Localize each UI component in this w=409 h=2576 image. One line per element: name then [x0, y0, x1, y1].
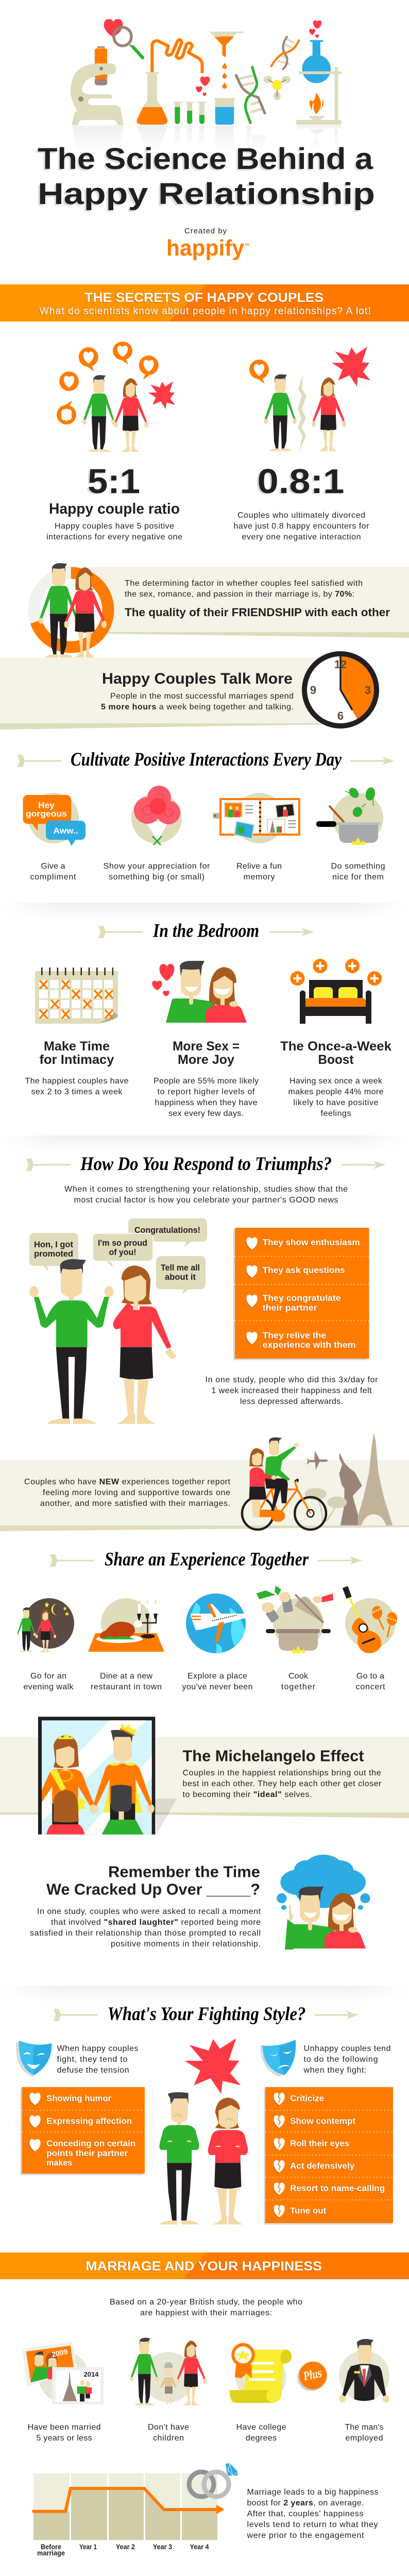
text: remember the time: We Cracked Up Over _____? — [46, 1880, 260, 1898]
panel: happy couples talk more: Happy Couples Talk More — [102, 670, 293, 687]
labels: happiest married people: Don't have — [148, 2423, 189, 2432]
icon: test tubes and beaker — [174, 98, 235, 125]
labels: cultivate actions: something big (or small) — [109, 873, 204, 882]
heading: how do you respond to triumphs: How Do You Respond to Triumphs? — [80, 1154, 332, 1175]
text: remember the time: positive moments in their relationship. — [111, 1940, 261, 1948]
text: unhappy couples fight: to do the following — [304, 2055, 378, 2064]
icon: couple without children — [130, 2338, 207, 2405]
text: michelangelo effect: The Michelangelo Effect — [182, 1747, 364, 1765]
panel: unhappy fight list: Show contempt — [290, 2116, 355, 2126]
text: divorced couples ratio: have just 0.8 happy encounters for — [234, 522, 369, 531]
happify logo: happify — [166, 235, 245, 261]
text: determining factor: The determining factor in whether couples feel satisfied with — [125, 579, 363, 588]
icon: globe with plane — [186, 1594, 247, 1653]
labels: cultivate actions: Relive a fun — [236, 862, 282, 871]
icon: microscope — [71, 46, 124, 125]
labels: cultivate actions: Give a — [41, 862, 65, 871]
illustration: woman listening — [113, 1265, 177, 1424]
illustration: mirror with ideal selves — [38, 1717, 155, 1835]
illustration: embracing couple — [39, 563, 79, 657]
illustration: couple on bicycle — [242, 1437, 326, 1530]
text: study result: In one study, people who did this 3x/day for — [205, 1376, 378, 1384]
text: more sex more joy: More Sex = — [173, 1039, 240, 1054]
text: marriage happiness boost: Marriage leads to a big happiness — [247, 2488, 378, 2497]
text: more sex more joy — [154, 1039, 259, 1118]
labels: cultivate actions: Do something — [331, 862, 385, 871]
chart: clock: 6 — [337, 709, 344, 722]
icon: happy mask — [16, 2041, 52, 2077]
labels: happiest married people — [28, 2423, 383, 2443]
text: marriage happiness boost: were prior to the engagement — [246, 2531, 364, 2540]
illustration: laughing couple with thought cloud — [277, 1855, 370, 1950]
text: make time for intimacy: sex 2 to 3 times a week — [31, 1088, 123, 1096]
icon: guitar and maracas — [343, 1586, 397, 1653]
text: marriage happiness boost: boost for 2 years, on average. — [247, 2499, 364, 2507]
text: once a week boost: likely to have positive — [294, 1098, 379, 1107]
icon: smiling couple with hearts — [152, 961, 247, 1023]
labels: cultivate actions: nice for them — [332, 873, 384, 882]
panel: triumph responses list: They congratulate — [263, 1293, 341, 1303]
panel: unhappy fight list: Criticize — [290, 2094, 324, 2103]
text: more sex more joy: to report higher levels of — [158, 1088, 255, 1096]
labels: shared experiences — [24, 1672, 385, 1691]
heading: in the bedroom: In the Bedroom — [152, 920, 259, 942]
panel: unhappy fight list: Tune out — [290, 2206, 326, 2215]
icon: compliment bubbles: gorgeous — [26, 809, 67, 819]
banner: secrets of happy couples — [0, 284, 409, 321]
title: Happy Relationship — [38, 177, 375, 211]
icon: wedding rings — [189, 2463, 238, 2497]
icon: floating hearts — [196, 21, 321, 96]
icon: cooking pot with spinach — [316, 786, 383, 845]
labels: happiest married people: degrees — [246, 2434, 277, 2443]
labels: happiest married people: Have been married — [28, 2423, 101, 2432]
text: more sex more joy: happiness when they have — [155, 1098, 258, 1107]
text: happy couples fight: When happy couples — [57, 2044, 138, 2053]
text: make time for intimacy: Make Time — [44, 1039, 110, 1054]
text: unhappy couples fight: when they fight: — [303, 2066, 367, 2075]
chart: happiness over years of marriage: Year 1 — [79, 2543, 97, 2551]
text: british study intro: are happiest with their marriages: — [140, 2309, 272, 2317]
panel: new experiences: Couples who have NEW experiences together report — [24, 1478, 231, 1486]
icon: diploma — [230, 2343, 292, 2403]
text: study result: 1 week increased their happiness and felt — [211, 1386, 372, 1395]
chart: clock: 12 — [334, 658, 347, 671]
icon: funnel with drops — [210, 31, 243, 89]
panel: happy fight list: Expressing affection — [46, 2116, 132, 2126]
banner: secrets of happy couples: What do scientists know about people in happy relationships? A lot! — [39, 306, 371, 317]
text: determining factor: the sex, romance, and passion in their marriage is, by 70%: — [125, 590, 354, 599]
labels: happiest married people: children — [153, 2434, 184, 2443]
text: study result: less depressed afterwards. — [240, 1397, 343, 1406]
speech bubbles — [29, 1218, 207, 1295]
text: michelangelo effect — [182, 1747, 382, 1799]
illustration: arguing couple — [159, 2039, 248, 2225]
chart: happiness over years of marriage: Before — [41, 2543, 61, 2551]
icon: compliment bubbles — [23, 793, 86, 846]
labels: shared experiences: Explore a place — [188, 1672, 247, 1681]
text: triumphs intro — [64, 1185, 348, 1205]
labels: shared experiences: concert — [355, 1683, 385, 1691]
created by label: Created by — [184, 227, 227, 235]
panel: happy fight list: Showing humor — [46, 2094, 111, 2103]
icon: photos 2009 and 2014 — [22, 2342, 104, 2404]
icon: photos 2009 and 2014: 2009 — [51, 2347, 69, 2359]
speech bubbles: I'm so proud — [98, 1238, 147, 1248]
labels: shared experiences: Go for an — [30, 1672, 66, 1681]
panel: happy couples talk more: People in the most successful marriages spend — [110, 692, 294, 701]
text: michelangelo effect: to becoming their "ideal" selves. — [182, 1790, 312, 1799]
panel: new experiences — [0, 1432, 409, 1531]
chart: clock — [304, 654, 377, 726]
illustration: man celebrating — [29, 1259, 113, 1424]
labels: happiest married people: 5 years or less — [36, 2434, 92, 2443]
text: remember the time: Remember the Time — [108, 1863, 260, 1880]
text: divorced couples ratio: every one negative interaction — [242, 533, 361, 541]
panel: unhappy fight list — [264, 2087, 393, 2225]
text: triumphs intro: When it comes to strengthening your relationship, studies show that the — [64, 1185, 348, 1194]
chart: happiness over years of marriage: Year 4 — [190, 2543, 209, 2551]
chart: happiness over years of marriage — [33, 2463, 238, 2557]
panel: new experiences: another, and more satisfied with their marriages. — [40, 1499, 230, 1508]
text: determining factor: The quality of their FRIENDSHIP with each other — [125, 606, 390, 619]
text: british study intro — [110, 2298, 302, 2317]
labels: shared experiences: together — [281, 1683, 316, 1691]
panel: friendship — [34, 563, 409, 658]
stat: 0.8:1: 0.8:1 — [258, 462, 344, 501]
icon: plus badge: Plus — [302, 2366, 323, 2384]
illustration: happy couple with bubbles — [57, 342, 175, 452]
labels: cultivate actions: Show your appreciation for — [103, 862, 210, 871]
panel: unhappy fight list: Roll their eyes — [290, 2139, 349, 2148]
text: study result — [205, 1376, 378, 1406]
labels: shared experiences: Cook — [288, 1672, 309, 1681]
text: unhappy couples fight: Unhappy couples tend — [304, 2044, 390, 2053]
labels: shared experiences: evening walk — [24, 1683, 74, 1691]
speech bubbles: of you! — [109, 1247, 136, 1257]
labels: shared experiences: Dine at a new — [100, 1672, 152, 1681]
icon: photo album — [213, 793, 299, 843]
text: determining factor — [125, 579, 390, 619]
panel: happy couples talk more — [0, 654, 377, 730]
text: make time for intimacy: for Intimacy — [39, 1053, 114, 1067]
labels: shared experiences: you've never been — [182, 1683, 252, 1691]
text: unhappy couples fight — [303, 2044, 390, 2075]
text: remember the time: satisfied in their relationship than those prompted to recall — [30, 1929, 261, 1938]
text: marriage happiness boost: levels tend to return to what they — [247, 2520, 378, 2529]
text: remember the time: In one study, couples who were asked to recall a moment — [37, 1907, 261, 1916]
icon: compliment bubbles: Hey — [38, 801, 55, 810]
panel: triumph responses list: experience with them — [263, 1340, 355, 1350]
panel: triumph responses list: They relive the — [263, 1330, 326, 1341]
panel: triumph responses list: their partner — [263, 1303, 317, 1313]
text: once a week boost: Having sex once a week — [289, 1077, 383, 1086]
chart: 70 percent ring — [34, 573, 108, 647]
icon: landmarks and plane — [304, 1432, 393, 1526]
reflection of lab equipment — [72, 125, 342, 155]
title: The Science Behind a — [38, 142, 373, 176]
heading: fighting style: What's Your Fighting Style? — [107, 2004, 306, 2025]
text: make time for intimacy — [25, 1039, 129, 1096]
labels: shared experiences: Go to a — [356, 1672, 384, 1681]
icon: heart and magnifier — [104, 19, 143, 58]
panel: michelangelo effect — [0, 1717, 409, 1835]
illustration: divorced couple with crack — [249, 347, 370, 452]
icon: evening walk — [16, 1598, 74, 1652]
icon: employed man — [339, 2339, 389, 2402]
text: michelangelo effect: best in each other. They help each other get closer — [182, 1780, 382, 1788]
text: happy couples fight: defuse the tension — [57, 2066, 129, 2075]
panel: triumph responses list: They show enthusiasm — [263, 1238, 360, 1247]
chart: clock: 3 — [365, 684, 371, 697]
text: more sex more joy: People are 55% more likely — [154, 1077, 259, 1086]
text: once a week boost: makes people 44% more — [288, 1088, 384, 1096]
chart: happiness over years of marriage: Year 3 — [153, 2543, 172, 2551]
text: happy couple ratio — [46, 501, 182, 541]
speech bubbles: Congratulations! — [134, 1225, 200, 1235]
text: michelangelo effect: Couples in the happiest relationships bring out the — [182, 1769, 381, 1777]
speech bubbles: Hon, I got — [34, 1240, 73, 1249]
text: once a week boost: The Once-a-Week — [280, 1039, 391, 1054]
heading: in the bedroom — [98, 920, 314, 942]
speech bubbles: promoted — [34, 1249, 73, 1259]
text: once a week boost — [280, 1039, 391, 1118]
text: once a week boost: feelings — [320, 1109, 351, 1118]
icon: DNA strands and molecule — [236, 37, 299, 123]
icon: compliment bubbles: Aww.. — [54, 826, 78, 836]
labels: happiest married people: Have college — [236, 2423, 286, 2432]
happify logo: TM — [245, 244, 249, 247]
panel: triumph responses list: They ask questions — [263, 1265, 345, 1275]
hero science illustration — [71, 19, 342, 155]
panel: triumph responses list — [233, 1228, 369, 1360]
text: happy couple ratio: Happy couples have 5 positive — [55, 522, 174, 531]
panel: unhappy fight list: Resort to name-calling — [290, 2183, 385, 2193]
text: divorced couples ratio: Couples who ultimately divorced — [237, 511, 365, 520]
icon: calendar — [35, 971, 118, 1024]
icon: round flask on burner stand — [296, 40, 342, 125]
text: british study intro: Based on a 20-year British study, the people who — [110, 2298, 302, 2307]
text: triumphs intro: most crucial factor is how you celebrate your partner's GOOD news — [74, 1196, 338, 1205]
text: happy couple ratio: interactions for every negative one — [46, 533, 182, 541]
panel: new experiences: feeling more loving and supportive towards one — [43, 1488, 230, 1497]
labels: happiest married people: The man's — [345, 2423, 383, 2432]
text: marriage happiness boost — [246, 2488, 378, 2540]
chart: happiness over years of marriage: marriage — [37, 2549, 65, 2557]
stat: 5:1: 5:1 — [88, 462, 140, 501]
heading: share an experience together: Share an Experience Together — [105, 1549, 309, 1570]
text: happy couples fight: fight, they tend to — [57, 2055, 128, 2064]
panel: happy fight list: points their partner — [46, 2148, 128, 2158]
icon: bed with plus signs — [291, 959, 382, 1024]
labels: happiest married people: employed — [345, 2434, 383, 2443]
banner: marriage and your happiness: MARRIAGE AND YOUR HAPPINESS — [86, 2259, 322, 2274]
heading: cultivate positive interactions: Cultivate Positive Interactions Every Day — [71, 749, 342, 770]
icon: photos 2009 and 2014: 2014 — [84, 2370, 99, 2378]
panel: happy fight list — [21, 2087, 145, 2175]
text: more sex more joy: More Joy — [178, 1053, 234, 1067]
chart: happiness over years of marriage: Year 2 — [116, 2543, 135, 2551]
text: remember the time: that involved "shared laughter" reported being more — [51, 1918, 261, 1927]
labels: cultivate actions: memory — [243, 873, 275, 882]
text: happy couple ratio: Happy couple ratio — [49, 501, 180, 517]
text: divorced couples ratio — [234, 511, 369, 541]
icon: sad mask — [260, 2040, 296, 2077]
text: more sex more joy: sex every few days. — [168, 1109, 244, 1118]
text: happy couples fight — [57, 2044, 138, 2075]
panel: happy couples talk more: 5 more hours a week being together and talking. — [101, 703, 294, 711]
labels: shared experiences: restaurant in town — [91, 1683, 162, 1691]
labels: cultivate actions — [30, 862, 385, 882]
icon: dine at restaurant — [88, 1598, 164, 1652]
text: marriage happiness boost: After that, couples' happiness — [247, 2510, 364, 2518]
icon: cook together — [255, 1586, 333, 1653]
labels: cultivate actions: compliment — [30, 873, 76, 882]
chart: clock: 9 — [310, 684, 316, 697]
banner: secrets of happy couples: THE SECRETS OF HAPPY COUPLES — [84, 291, 323, 305]
icon: roses bouquet — [131, 786, 182, 845]
icon: flask with tube — [137, 40, 202, 125]
banner: marriage and your happiness — [0, 2252, 409, 2279]
panel: unhappy fight list: Act defensively — [290, 2161, 355, 2171]
speech bubbles: Tell me all — [161, 1263, 200, 1273]
text: once a week boost: Boost — [318, 1053, 354, 1067]
title — [38, 142, 375, 211]
text: remember the time — [30, 1863, 261, 1948]
panel: happy fight list: Conceding on certain — [46, 2139, 135, 2148]
icon: plus badge — [297, 2362, 327, 2391]
speech bubbles: about it — [165, 1272, 196, 1282]
text: make time for intimacy: The happiest couples have — [25, 1077, 129, 1086]
panel: happy fight list: makes — [46, 2158, 72, 2168]
